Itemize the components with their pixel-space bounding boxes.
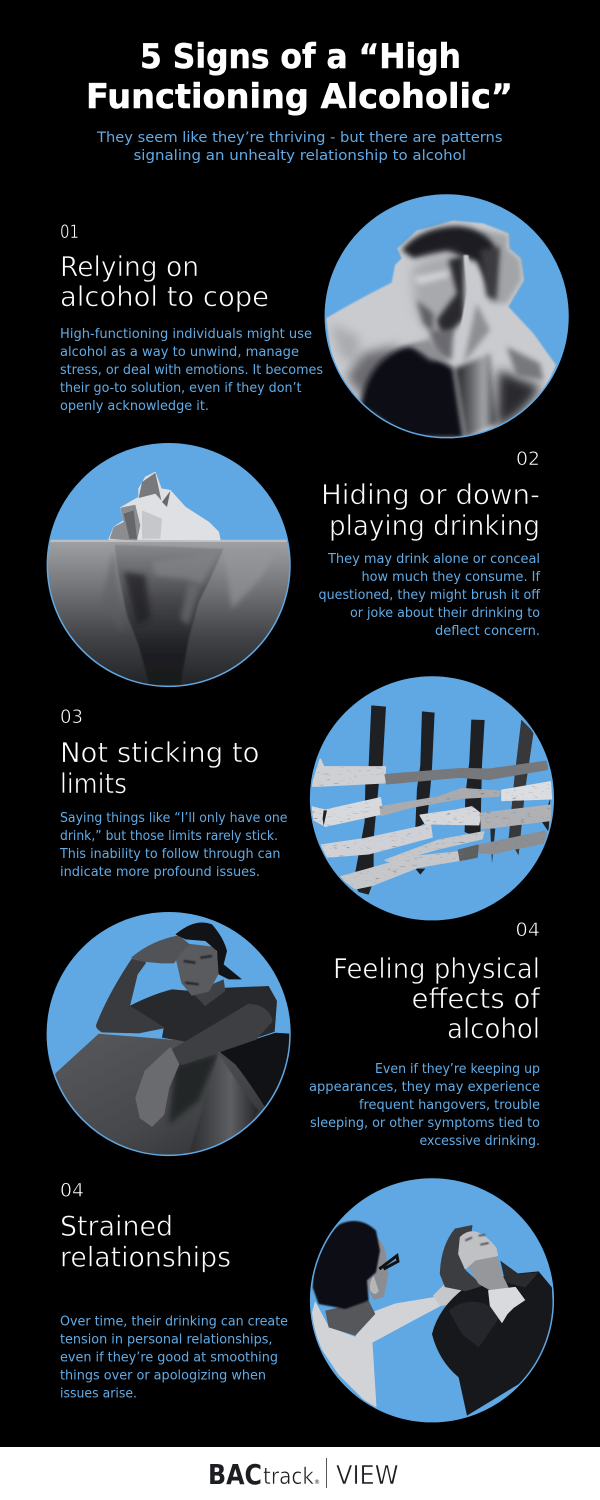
hand on head: [132, 936, 189, 963]
lower arm: [170, 1004, 272, 1064]
heading: relying on alcohol: [60, 251, 269, 313]
photo circle: broken fence: [305, 672, 560, 927]
heading: feeling physical effects: [333, 953, 541, 1045]
logo: BACtrack: track: [263, 1464, 315, 1490]
heading: hiding or downplaying: Hiding or down-: [321, 479, 540, 511]
body text 3: This inability to follow through can: [59, 847, 281, 862]
heading: not sticking to limits: Not sticking to: [60, 737, 260, 769]
body text 1: stress, or deal with emotions. It becomes: [60, 363, 323, 378]
face: [175, 944, 219, 995]
body text 1: High-functioning individuals might use: [60, 327, 312, 342]
raised arm: [97, 959, 164, 1033]
logo: BACtrack: ®: [314, 1479, 320, 1486]
iceberg top: [109, 472, 220, 540]
body text 1: their go-to solution, even if they don’t: [60, 381, 302, 396]
body text 4: appearances, they may experience: [309, 1080, 540, 1095]
heading: strained relationships: relationships: [60, 1242, 231, 1274]
fence posts: [355, 705, 550, 895]
subtitle: [96, 130, 503, 164]
panel: sign 1 text: [60, 221, 323, 414]
body text 4: [309, 1062, 540, 1149]
subtitle: signaling an unhealty relationship to alcohol: [134, 148, 466, 164]
logo: BACtrack: BAC: [208, 1458, 262, 1491]
photo circle: iceberg: [42, 439, 297, 694]
body text 2: questioned, they might brush it off: [318, 588, 541, 603]
body text 4: sleeping, or other symptoms tied to: [310, 1116, 540, 1131]
body text 4: frequent hangovers, trouble: [359, 1098, 540, 1113]
title: [86, 37, 513, 116]
body text 4: excessive drinking.: [420, 1134, 540, 1149]
body text 3: indicate more profound issues.: [60, 865, 260, 880]
logo divider: [326, 1458, 327, 1488]
body text 2: They may drink alone or conceal: [327, 552, 540, 567]
woman face: [459, 1232, 498, 1269]
neck: [192, 979, 225, 1006]
water: [42, 540, 297, 690]
lower hand: [136, 1048, 179, 1126]
woman hair: [440, 1226, 482, 1291]
heading: hiding or downplaying: [321, 479, 540, 542]
woman body: [432, 1271, 554, 1416]
body text 2: or joke about their drinking to: [350, 606, 540, 621]
man neck: [325, 1301, 375, 1336]
heading: relying on alcohol: Relying on: [60, 251, 199, 283]
body text 3: drink,” but those limits rarely stick.: [60, 829, 278, 844]
title: 5 Signs of a “High: [140, 37, 461, 76]
heading: hiding or downplaying: playing drinking: [329, 510, 540, 542]
number 04: 04: [516, 919, 540, 941]
heading: strained relationships: [60, 1210, 231, 1274]
body text 3: Saying things like “I’ll only have one: [60, 811, 288, 826]
body text 3: [59, 811, 288, 880]
underwater ice: [115, 545, 224, 685]
heading: feeling physical effects: effects of: [412, 983, 541, 1015]
body text 2: how much they consume. If: [362, 570, 540, 585]
number 01: 01: [60, 221, 79, 243]
logo: VIEW: VIEW: [336, 1461, 398, 1491]
number 03: 03: [60, 706, 83, 728]
body text 5: even if they’re good at smoothing: [60, 1350, 278, 1366]
panel: sign 2 text: [318, 448, 541, 639]
heading: strained relationships: Strained: [60, 1210, 173, 1242]
subtitle: They seem like they’re thriving - but there are patterns: [96, 130, 503, 146]
heading: relying on alcohol: alcohol to cope: [60, 281, 269, 313]
body text 5: [60, 1314, 288, 1402]
body text 1: openly acknowledge it.: [60, 399, 209, 414]
fence rails: [312, 759, 551, 889]
logo: BACtrack: [208, 1458, 320, 1491]
body text 2: deflect concern.: [435, 624, 540, 639]
number 02: 02: [516, 448, 540, 470]
panel: sign 3 text: [59, 706, 288, 880]
woman hand: [489, 1287, 525, 1322]
body text 5: Over time, their drinking can create: [60, 1314, 288, 1330]
body text 5: tension in personal relationships,: [60, 1332, 272, 1348]
body text 5: things over or apologizing when: [60, 1368, 266, 1384]
man hair: [313, 1221, 380, 1309]
title: Functioning Alcoholic”: [86, 77, 513, 116]
body text 4: Even if they’re keeping up: [375, 1062, 540, 1077]
woman neck: [468, 1256, 508, 1290]
man face: [365, 1234, 389, 1300]
photo circle: blurred man holding head: [320, 190, 575, 445]
panel: sign 5 text: [60, 1180, 288, 1402]
heading: feeling physical effects: alcohol: [447, 1013, 540, 1045]
draped cloth: [55, 1034, 290, 1156]
body text 1: [60, 327, 323, 414]
photo circle: man reaching to woman: [305, 1174, 560, 1429]
panel: sign 4 text: [309, 919, 541, 1149]
man shirt: [310, 1297, 440, 1407]
heading: not sticking to limits: [60, 737, 260, 800]
shirt: [130, 986, 277, 1042]
heading: not sticking to limits: limits: [60, 768, 127, 800]
photo circle: man with hand on forehead: [42, 908, 297, 1163]
footer bar: [0, 1447, 600, 1500]
man hand: [433, 1284, 462, 1306]
body text 2: [318, 552, 541, 639]
heading: feeling physical effects: Feeling physical: [333, 953, 540, 985]
glasses: [379, 1256, 398, 1269]
hair: [175, 922, 242, 979]
body text 1: alcohol as a way to unwind, manage: [60, 345, 299, 360]
number 04 repeated: 04: [60, 1180, 84, 1202]
body text 5: issues arise.: [60, 1386, 137, 1402]
